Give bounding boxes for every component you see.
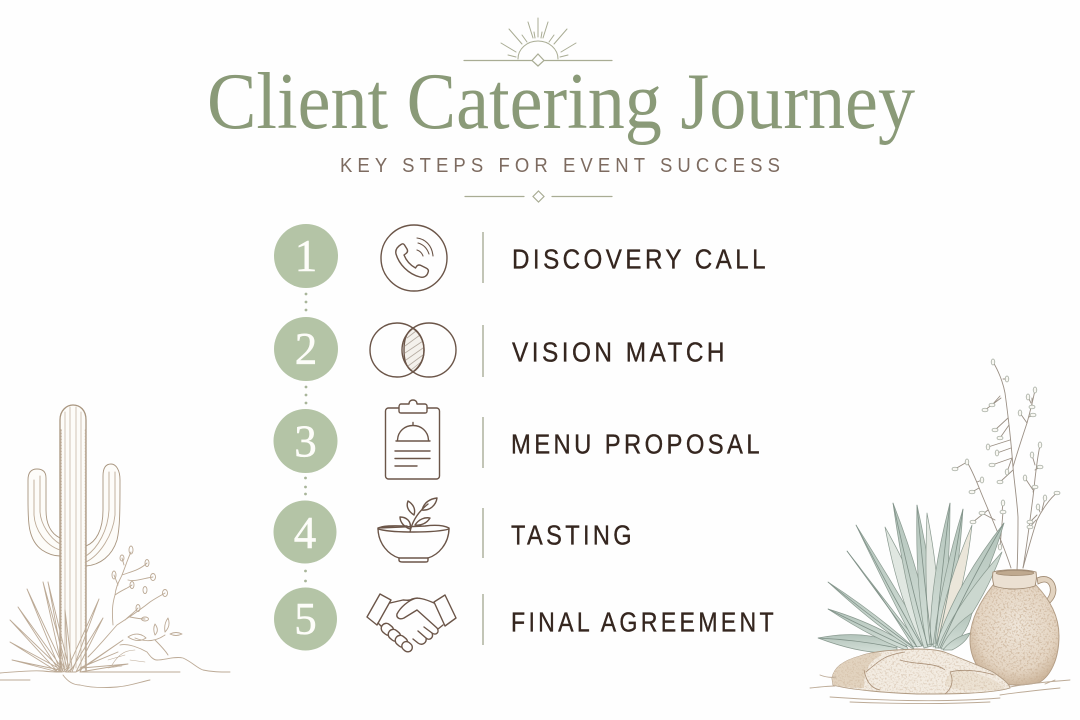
step 5 <box>274 588 777 654</box>
icon: venn diagram <box>370 323 456 377</box>
divider <box>482 594 484 645</box>
connector dots 2-3 <box>305 386 307 404</box>
number badge 5: 5 <box>294 594 317 644</box>
divider <box>482 508 484 558</box>
number badge 2 <box>274 317 338 381</box>
title: Client Catering Journey <box>207 56 915 146</box>
label: discovery call: DISCOVERY CALL <box>512 244 769 274</box>
step 1 <box>274 224 769 291</box>
flowering branches in vase <box>952 359 1060 570</box>
label: tasting: TASTING <box>511 520 635 550</box>
number badge 4: 4 <box>294 508 316 558</box>
illustration: cactus scene <box>0 405 230 688</box>
desert ground <box>0 645 230 688</box>
icon: bowl with sprig <box>378 498 449 562</box>
yucca at cactus base <box>10 582 128 672</box>
number badge 5 <box>274 588 337 650</box>
sunrise ornament <box>464 18 612 66</box>
connector dots 4-5 <box>304 570 307 582</box>
subtitle divider ornament <box>465 191 612 202</box>
step 4 <box>274 498 635 564</box>
rock <box>832 648 1010 694</box>
step 2 <box>274 317 728 381</box>
agave plant <box>818 503 1004 653</box>
label: vision match: VISION MATCH <box>512 336 728 368</box>
cactus <box>28 405 120 670</box>
flowering branch <box>88 546 168 657</box>
number badge 3: 3 <box>294 416 317 466</box>
icon: handshake <box>367 594 456 654</box>
number badge 3 <box>274 409 338 473</box>
connector dots 1-2 <box>305 293 307 311</box>
number badge 1 <box>274 224 338 288</box>
illustration: agave, vase and rock <box>810 359 1070 704</box>
clay vase <box>965 570 1065 686</box>
divider <box>482 417 484 468</box>
number badge 4 <box>274 500 336 564</box>
number badge 2: 2 <box>295 324 317 374</box>
divider <box>482 325 484 377</box>
connector dots 3-4 <box>304 477 307 495</box>
icon: phone call <box>381 225 447 291</box>
divider <box>482 232 484 283</box>
subtitle: KEY STEPS FOR EVENT SUCCESS <box>340 155 785 177</box>
icon: menu clipboard <box>386 400 440 479</box>
small leaf sprig <box>128 618 182 655</box>
number badge 1: 1 <box>295 231 317 281</box>
label: menu proposal: MENU PROPOSAL <box>511 428 763 460</box>
label: final agreement: FINAL AGREEMENT <box>511 606 777 638</box>
right ground sketch <box>810 675 1070 704</box>
step 3 <box>274 400 763 479</box>
